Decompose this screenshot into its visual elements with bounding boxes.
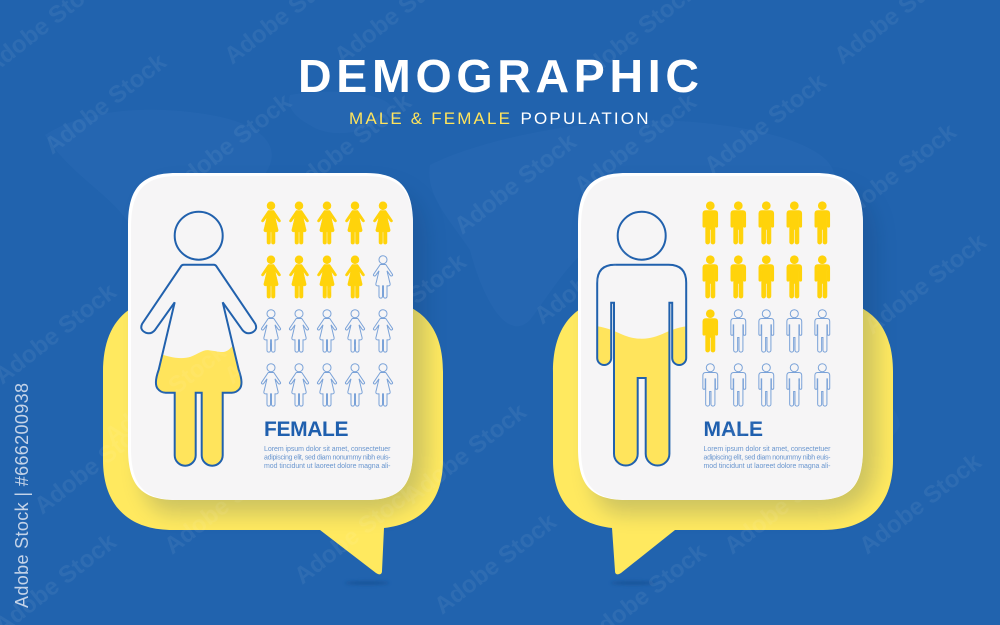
card (578, 173, 863, 500)
subtitle: MALE & FEMALE (349, 109, 510, 128)
speech bubble: male (553, 298, 893, 574)
watermark pattern: Adobe Stock (429, 508, 562, 620)
panel: female (103, 173, 443, 585)
card face (581, 176, 863, 500)
stock id vertical text: Adobe Stock | #666200938 (12, 383, 32, 608)
watermark pattern: Adobe Stock (284, 88, 417, 200)
card shadow (140, 185, 427, 514)
tail shadow (611, 581, 655, 585)
heading: female: FEMALE (264, 418, 348, 441)
text block: female: mod tincidunt ut laoreet dolore magna ali- (264, 463, 391, 470)
speech bubble: female (103, 298, 443, 574)
watermark pattern: Adobe Stock (829, 118, 962, 230)
watermark pattern: Adobe Stock (219, 278, 352, 390)
watermark pattern: Adobe Stock (719, 448, 852, 560)
panel: male (553, 173, 893, 585)
watermark pattern: Adobe Stock (339, 248, 472, 360)
subtitle (349, 109, 648, 128)
watermark pattern: Adobe Stock (649, 388, 782, 500)
card shadow (590, 185, 877, 514)
watermark pattern: Adobe Stock (399, 398, 532, 510)
large female figure (141, 212, 256, 472)
watermark pattern: Adobe Stock (449, 128, 582, 240)
watermark pattern: Adobe Stock (699, 68, 832, 180)
text block: male: adipiscing elit, sed diam nonummy nibh euis- (704, 454, 831, 461)
text block: female (264, 446, 391, 470)
text block: female: Lorem ipsum dolor sit amet, consectetuer (264, 446, 391, 453)
card (128, 173, 413, 500)
watermark pattern: Adobe Stock (569, 88, 702, 200)
watermark pattern: Adobe Stock (29, 408, 162, 520)
watermark pattern: Adobe Stock (164, 88, 297, 200)
watermark pattern: Adobe Stock (854, 448, 987, 560)
card face (131, 176, 413, 500)
icon grid: female, 9 filled of 20 (261, 202, 393, 406)
watermark pattern: Adobe Stock (99, 338, 232, 450)
text block: male (704, 446, 831, 470)
watermark pattern: Adobe Stock (529, 218, 662, 330)
heading: male: MALE (704, 418, 763, 441)
world map silhouette (45, 92, 900, 447)
large male figure (592, 212, 692, 472)
watermark pattern: Adobe Stock (289, 478, 422, 590)
icon grid: male, 11 filled of 20 (703, 202, 830, 406)
text block: female: adipiscing elit, sed diam nonummy nibh euis- (264, 454, 391, 461)
watermark pattern: Adobe Stock (159, 448, 292, 560)
watermark pattern: Adobe Stock (859, 228, 992, 340)
text block: male: mod tincidunt ut laoreet dolore magna ali- (704, 463, 831, 470)
tail shadow (345, 581, 389, 585)
subtitle: POPULATION (520, 109, 648, 128)
watermark pattern: Adobe Stock (39, 48, 172, 160)
text block: male: Lorem ipsum dolor sit amet, consectetuer (704, 446, 831, 453)
title: DEMOGRAPHIC (298, 50, 699, 102)
watermark pattern: Adobe Stock (719, 338, 852, 450)
